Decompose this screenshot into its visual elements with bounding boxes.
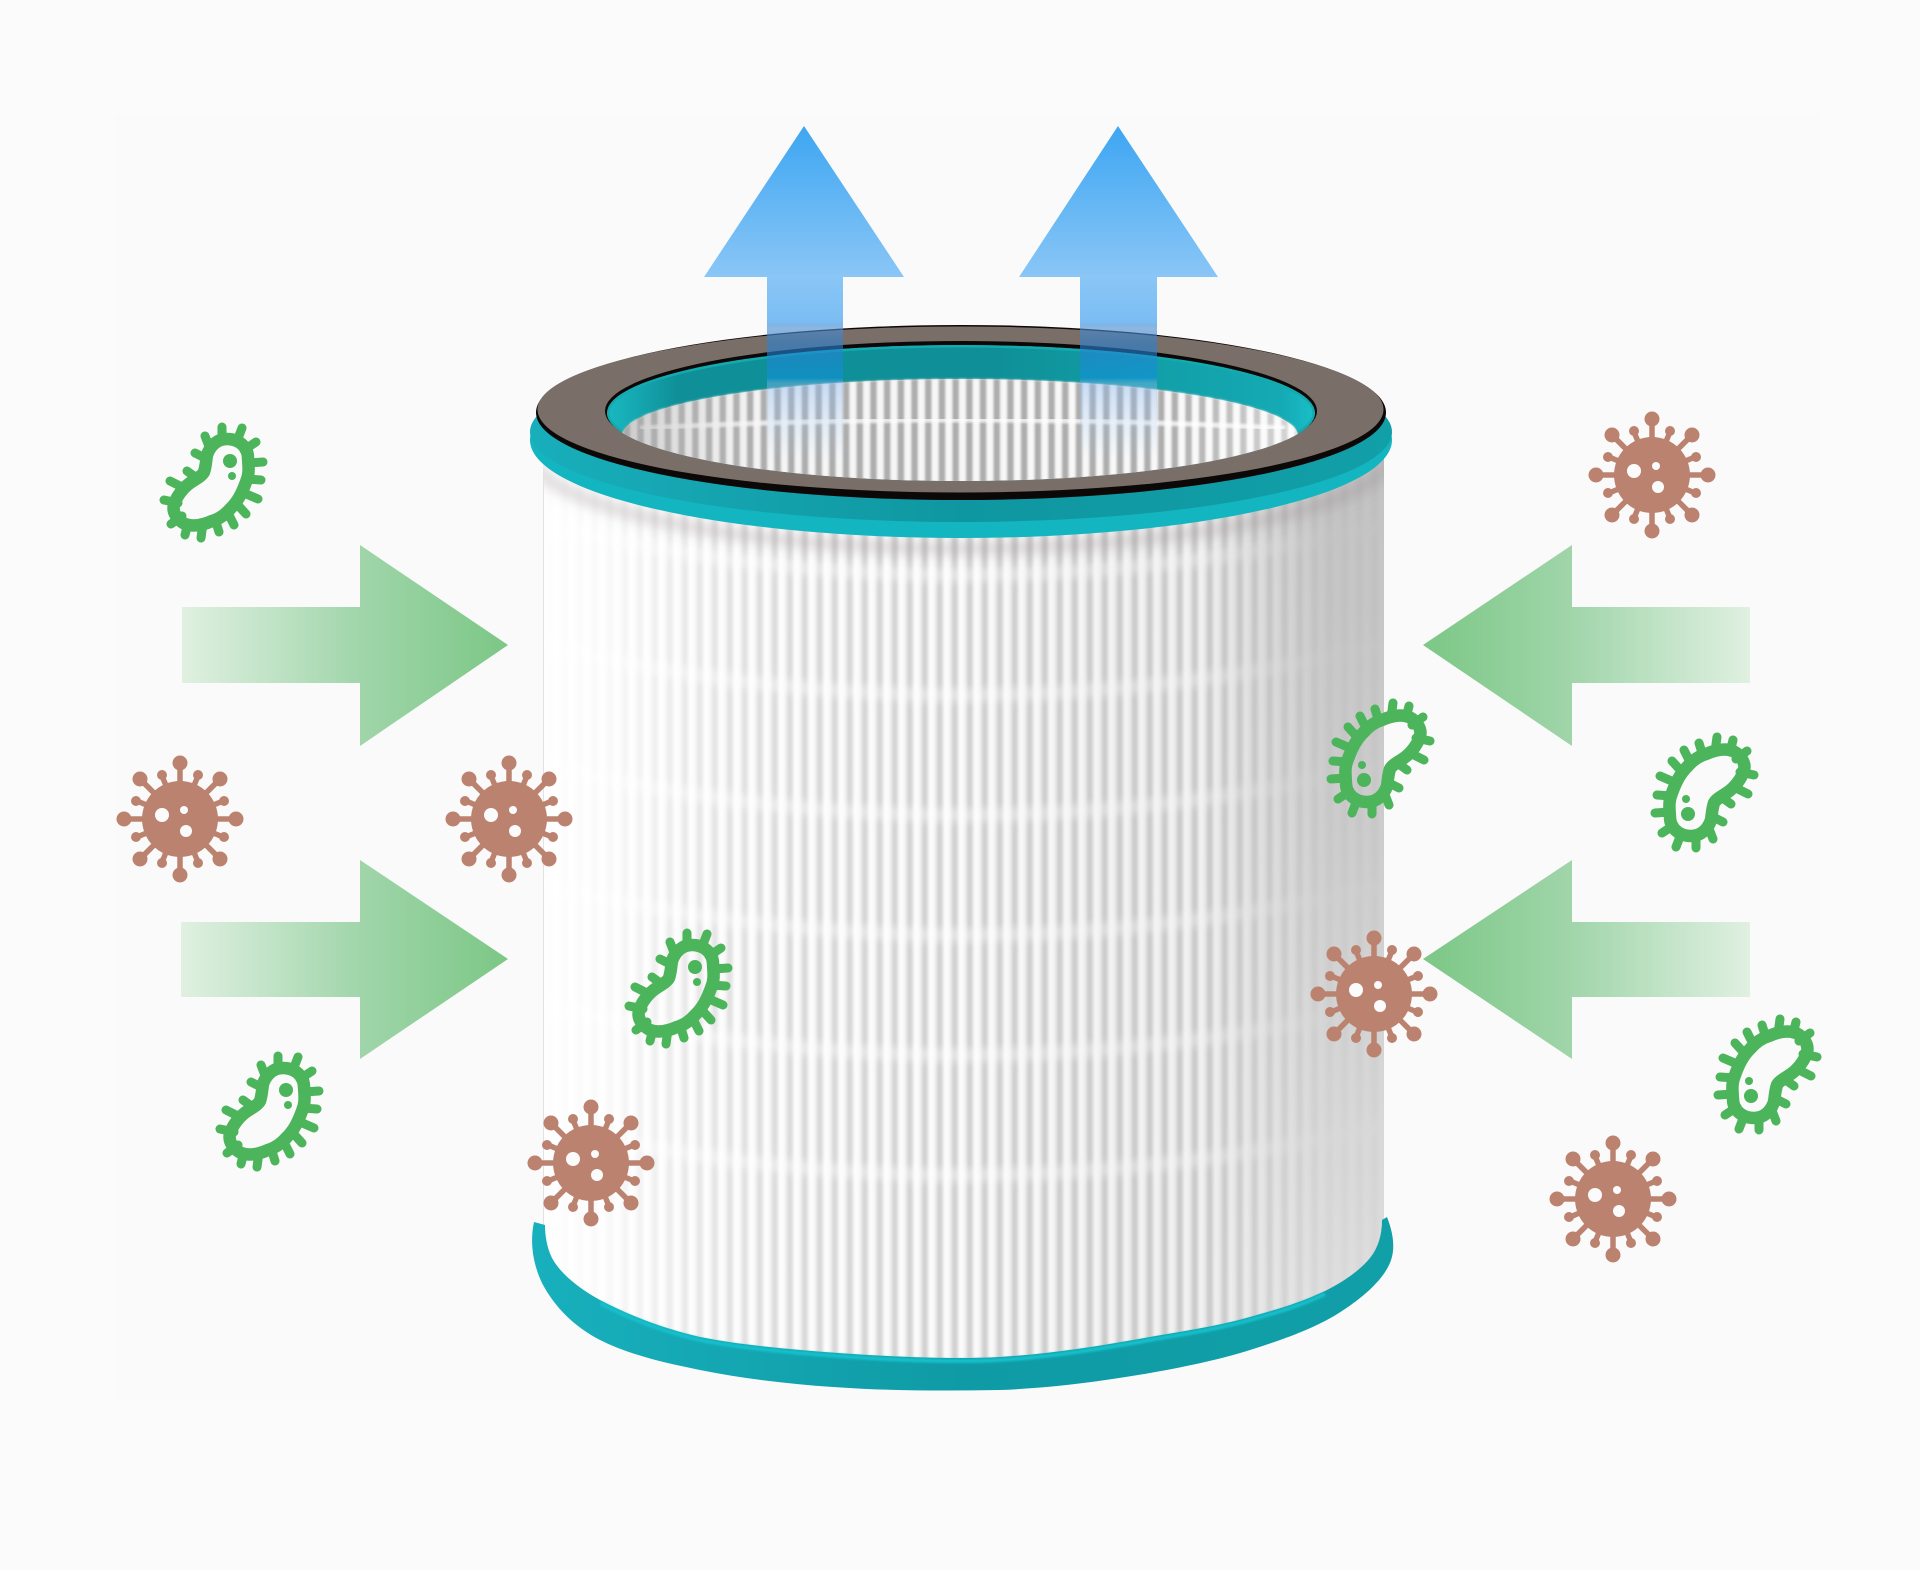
icon: virus: [116, 756, 244, 882]
arrow: air in, upper right: [1423, 545, 1750, 746]
icon: bacterium: [1655, 737, 1754, 848]
icon: bacterium: [1331, 703, 1430, 814]
top teal rim: [530, 342, 1392, 538]
icon: virus: [528, 1100, 654, 1226]
icon: virus: [1310, 930, 1438, 1058]
icon: virus: [1588, 412, 1716, 538]
icon: bacterium: [1718, 1019, 1817, 1130]
bottom teal rim: [532, 1217, 1393, 1391]
icon: virus: [446, 756, 572, 882]
dark rubber seal ring: [536, 325, 1386, 500]
icon: virus: [1550, 1136, 1676, 1262]
icon: bacterium: [220, 1056, 319, 1167]
icon: bacterium: [164, 427, 263, 538]
pleated filter body: [543, 459, 1384, 1358]
arrow: clean air out, left: [704, 126, 904, 460]
arrow: clean air out, right: [1019, 126, 1218, 460]
arrow: air in, upper left: [182, 545, 508, 746]
icon: bacterium: [629, 933, 728, 1044]
arrow: air in, lower left: [181, 860, 508, 1059]
diagram: cylindrical air filter trapping microbes: [116, 126, 1822, 1390]
inner opening with pleats: [605, 341, 1317, 493]
arrow: air in, lower right: [1423, 860, 1750, 1059]
filter cylinder: [529, 325, 1393, 1391]
